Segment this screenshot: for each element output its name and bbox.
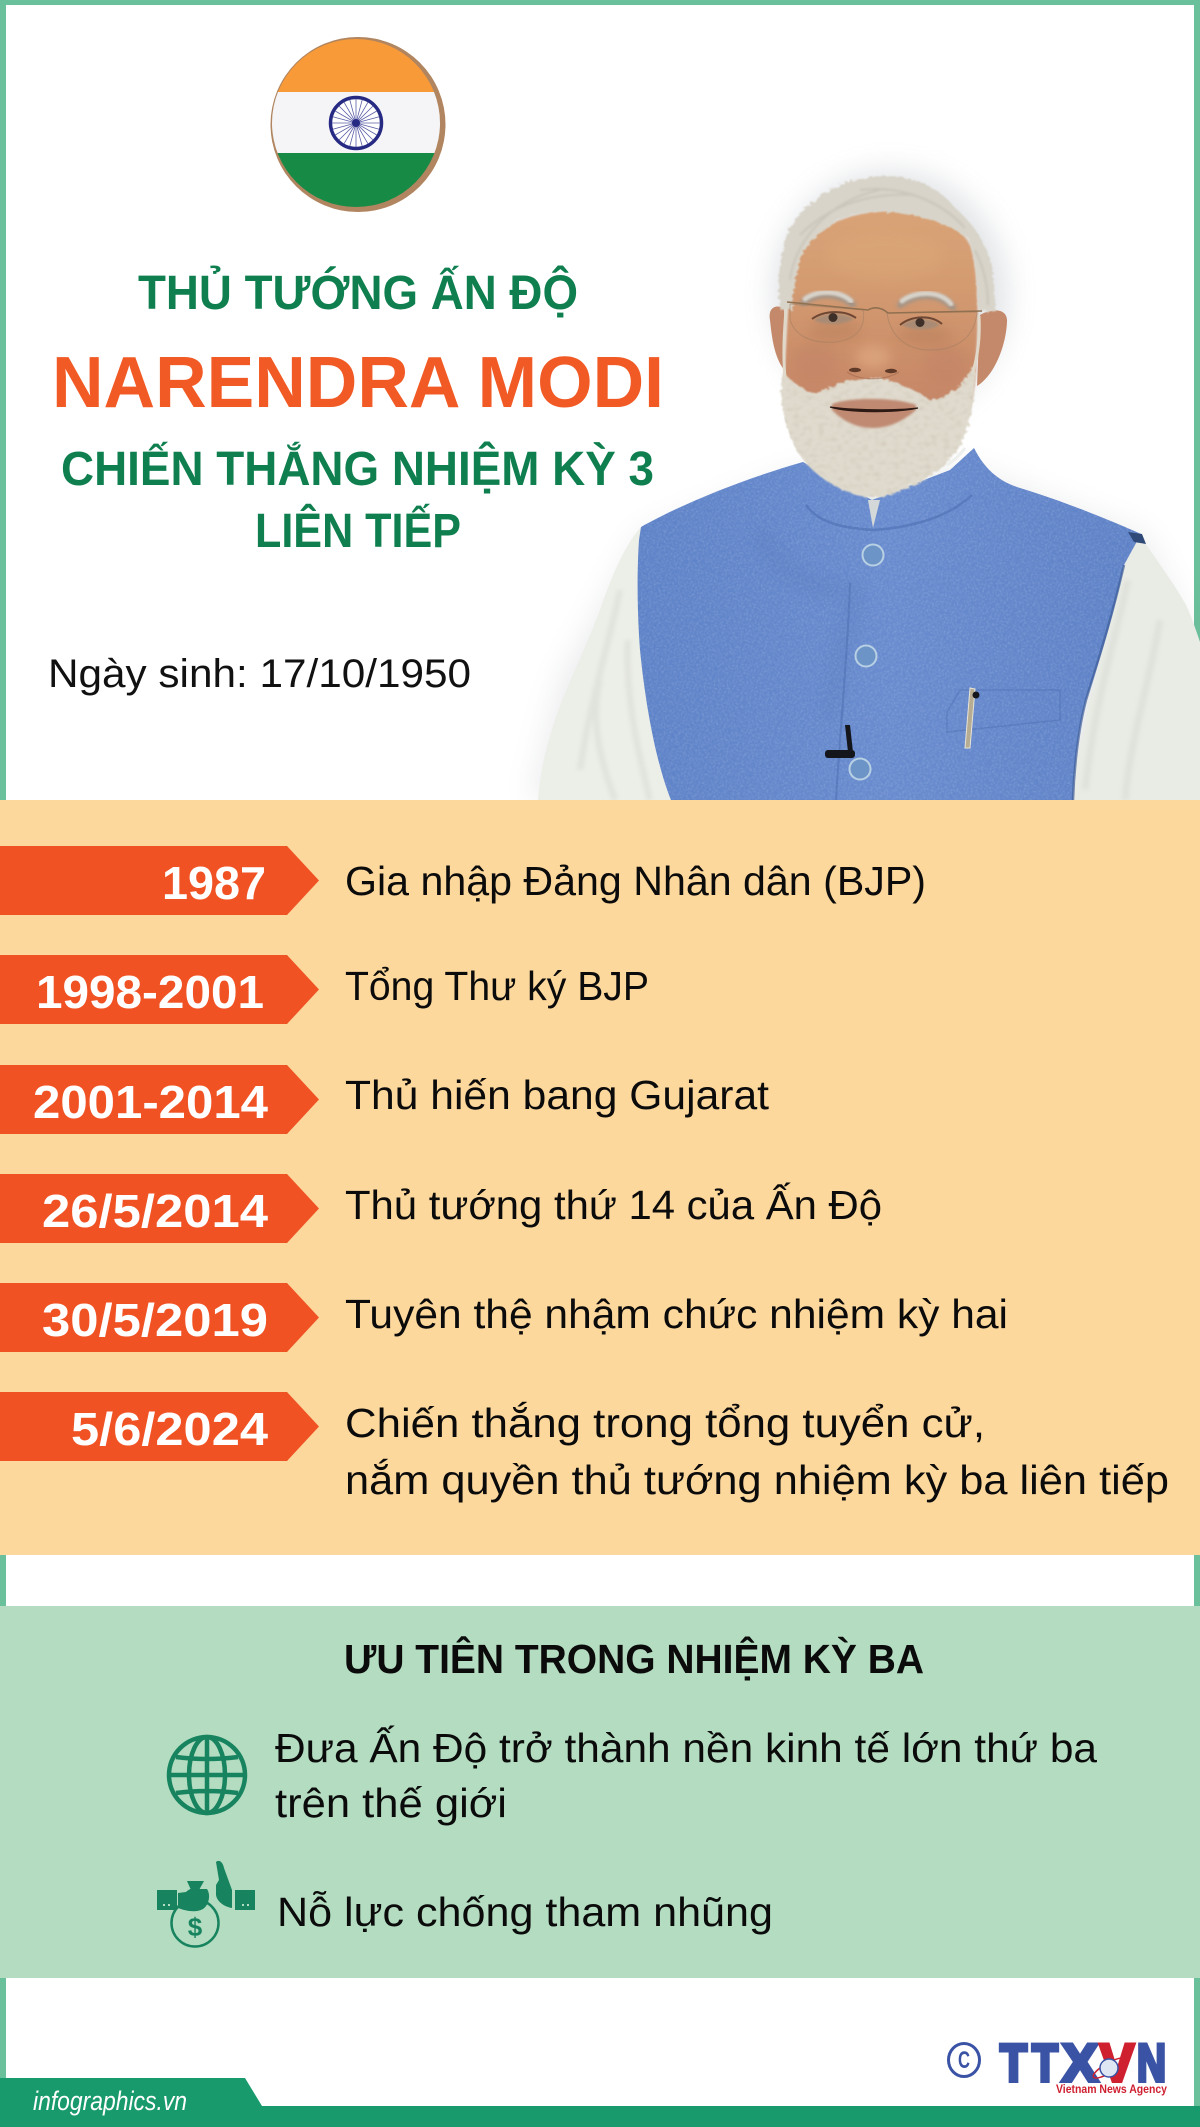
timeline row: 1998-2001: [0, 955, 649, 1024]
mouth: [830, 399, 918, 428]
timeline row: 30/5/2019: Tuyên thệ nhậm chức nhiệm kỳ hai: [345, 1291, 1008, 1337]
panel: third term priorities: [0, 1606, 1200, 1978]
face: [782, 210, 979, 402]
priorities heading: ƯU TIÊN TRONG NHIỆM KỲ BA: [344, 1636, 924, 1682]
timeline row: 1998-2001: Tổng Thư ký BJP: [345, 963, 649, 1009]
priority text: economy: Đưa Ấn Độ trở thành nền kinh tế lớn thứ ba: [275, 1725, 1097, 1771]
timeline row: 26/5/2014: Thủ tướng thứ 14 của Ấn Độ: [345, 1182, 882, 1228]
timeline row: 5/6/2024: [0, 1392, 1169, 1503]
panel: career timeline: [0, 800, 1200, 1555]
icon: refusing a money bag: [157, 1861, 255, 1946]
portrait of Narendra Modi: [530, 170, 1200, 800]
logo: TTXVN Vietnam News Agency: C: [958, 2047, 970, 2074]
subtitle line one: CHIẾN THẮNG NHIỆM KỲ 3: [61, 441, 654, 496]
timeline row: 2001-2014: [0, 1065, 770, 1134]
priority text: economy: [275, 1725, 1097, 1826]
timeline row: 5/6/2024: 5/6/2024: [71, 1403, 268, 1455]
logo: TTXVN Vietnam News Agency: T: [1000, 2034, 1027, 2093]
priority text: economy: trên thế giới: [275, 1780, 507, 1826]
logo: TTXVN Vietnam News Agency: V: [1100, 2034, 1134, 2093]
vest: [638, 448, 1141, 800]
ears: [770, 306, 1007, 386]
subtitle line two: LIÊN TIẾP: [255, 503, 461, 558]
hair: [779, 176, 996, 312]
timeline row: 30/5/2019: [0, 1283, 1008, 1352]
footer bar: [0, 2078, 1200, 2127]
timeline row: 26/5/2014: 26/5/2014: [42, 1185, 268, 1237]
timeline row: 26/5/2014: [0, 1174, 882, 1243]
timeline row: 1987: 1987: [162, 857, 266, 909]
website label: infographics.vn: [33, 2086, 187, 2116]
title: Narendra Modi: NARENDRA MODI: [52, 343, 664, 423]
timeline row: 2001-2014: 2001-2014: [33, 1076, 268, 1128]
right sleeve: [1068, 530, 1200, 800]
pen in pocket: [965, 688, 975, 748]
eyebrows: [803, 292, 953, 308]
timeline row: 30/5/2019: 30/5/2019: [42, 1294, 268, 1346]
logo: TTXVN Vietnam News Agency: X: [1062, 2034, 1098, 2093]
logo: TTXVN Vietnam News Agency: T: [1032, 2034, 1058, 2093]
eyes: [812, 312, 942, 330]
priority text: anti-corruption: Nỗ lực chống tham nhũng: [277, 1889, 773, 1935]
lapel microphone: [825, 725, 855, 758]
logo: TTXVN Vietnam News Agency: [948, 2034, 1168, 2096]
timeline row: 1987: Gia nhập Đảng Nhân dân (BJP): [345, 858, 926, 904]
glasses: [787, 302, 982, 350]
title: prime minister of India: THỦ TƯỚNG ẤN ĐỘ: [138, 265, 578, 320]
beard and moustache: [781, 365, 974, 497]
logo: TTXVN Vietnam News Agency: N: [1137, 2034, 1166, 2093]
timeline row: 5/6/2024: Chiến thắng trong tổng tuyển cử,: [345, 1400, 985, 1446]
buttons: [850, 544, 884, 780]
flag of India badge: [270, 37, 446, 213]
sideburns: [784, 310, 979, 378]
left sleeve: [538, 527, 680, 800]
icon: globe: [169, 1737, 245, 1813]
timeline row: 1987: [0, 846, 926, 915]
nose: [847, 345, 899, 379]
date of birth: Ngày sinh: 17/10/1950: [48, 652, 471, 696]
timeline row: 5/6/2024: nắm quyền thủ tướng nhiệm kỳ ba liên tiếp: [345, 1457, 1169, 1503]
logo: TTXVN Vietnam News Agency: Vietnam News Agency: [1056, 2084, 1168, 2096]
icon: refusing a money bag: $: [188, 1912, 203, 1942]
timeline row: 1998-2001: 1998-2001: [36, 966, 264, 1018]
collar and placket: [806, 448, 1060, 800]
timeline row: 2001-2014: Thủ hiến bang Gujarat: [345, 1072, 770, 1118]
